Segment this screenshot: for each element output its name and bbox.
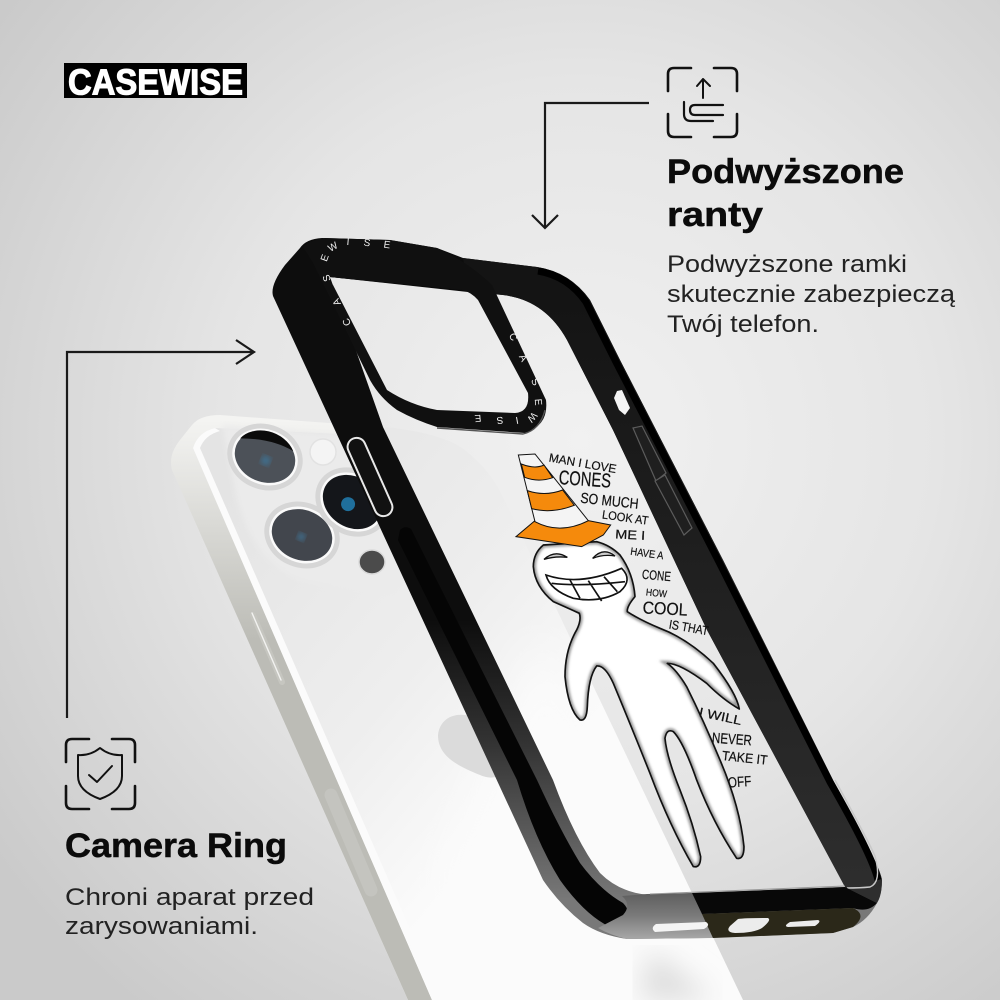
logo: CASEWISE: CASEWISE: [68, 62, 243, 102]
ring letters: A: [516, 353, 529, 364]
handwritten caption: CONES: [558, 467, 612, 493]
heading: Podwyższone ranty: [667, 153, 904, 234]
left bumper black stripe: [398, 527, 628, 927]
heading: Camera Ring: Camera Ring: [65, 827, 287, 865]
ring letters: W: [524, 410, 539, 424]
phone side buttons: [252, 613, 371, 890]
illustration: character with traffic cone: [516, 450, 768, 867]
ring letters: W: [326, 240, 341, 255]
icon: shield with check: [66, 739, 135, 809]
window top band: [330, 257, 468, 292]
ring letters: C: [506, 331, 519, 343]
lidar sensor: [359, 550, 385, 574]
handwritten caption: HOW: [645, 587, 668, 601]
arrow: top callout to case rim: [532, 103, 649, 228]
ring letters: E: [474, 412, 482, 423]
lens 1: [220, 416, 310, 498]
handwritten caption: SO MUCH: [580, 491, 639, 513]
handwritten caption: NEVER: [711, 731, 752, 749]
ring letters: S: [496, 414, 504, 425]
port openings: [653, 918, 819, 933]
cone: [516, 454, 611, 547]
bottom bumper: [598, 893, 713, 939]
body: [533, 542, 744, 867]
icon: raised edges: [668, 68, 737, 137]
side button on case: [345, 435, 395, 519]
right bumper: [463, 258, 882, 903]
lens 2: [257, 494, 347, 576]
grin with teeth: [546, 568, 627, 601]
text block: camera ring description: [65, 884, 314, 940]
ring letters: [319, 237, 543, 425]
lens 3: [305, 457, 399, 547]
handwritten caption: HAVE A: [630, 546, 665, 562]
heading: Podwyższone ranty: Podwyższone: [667, 153, 904, 191]
text block: raised edges description: [667, 251, 956, 338]
handwritten caption: OFF: [727, 774, 752, 792]
phone: white iPhone seen from the back: [165, 413, 743, 1000]
text block: raised edges description: Twój telefon.: [667, 311, 819, 338]
ring letters: S: [321, 273, 334, 283]
handwritten caption: ME I: [615, 527, 646, 543]
ring letters: E: [383, 240, 391, 251]
ring letters: I: [346, 237, 350, 248]
eyes: [544, 552, 615, 559]
handwritten caption: LOOK AT: [601, 507, 650, 528]
flash: [310, 439, 336, 465]
ring letters: E: [532, 398, 543, 406]
ring letters: C: [341, 316, 354, 327]
text block: raised edges description: skutecznie zabezpieczą: [667, 281, 956, 308]
handwritten caption: MAN I LOVE: [548, 450, 618, 476]
text block: raised edges description: Podwyższone ramki: [667, 251, 907, 278]
ring letters: S: [528, 377, 541, 388]
handwritten caption: TAKE IT: [721, 748, 768, 768]
ring letters: A: [331, 296, 344, 307]
handwritten caption: I WILL: [698, 705, 743, 728]
handwritten caption: [548, 450, 768, 792]
heading: Podwyższone ranty: ranty: [667, 196, 763, 234]
camera ring with CASEWISE lettering: [303, 237, 546, 434]
ring letters: I: [515, 414, 519, 425]
text block: camera ring description: Chroni aparat przed: [65, 884, 314, 911]
ring letters: S: [363, 238, 371, 249]
handwritten caption: COOL: [642, 597, 688, 620]
camera module: [220, 416, 405, 595]
apple logo: [438, 715, 510, 778]
ring letters: E: [319, 253, 332, 263]
text block: camera ring description: zarysowaniami.: [65, 913, 258, 940]
volume buttons on case: [633, 426, 692, 535]
handwritten caption: CONE: [641, 567, 672, 584]
arrow: left callout to camera ring: [67, 340, 254, 718]
mute switch hole: [614, 390, 630, 415]
case: clear body with black bumper: [272, 238, 882, 939]
handwritten caption: IS THAT: [668, 617, 710, 638]
